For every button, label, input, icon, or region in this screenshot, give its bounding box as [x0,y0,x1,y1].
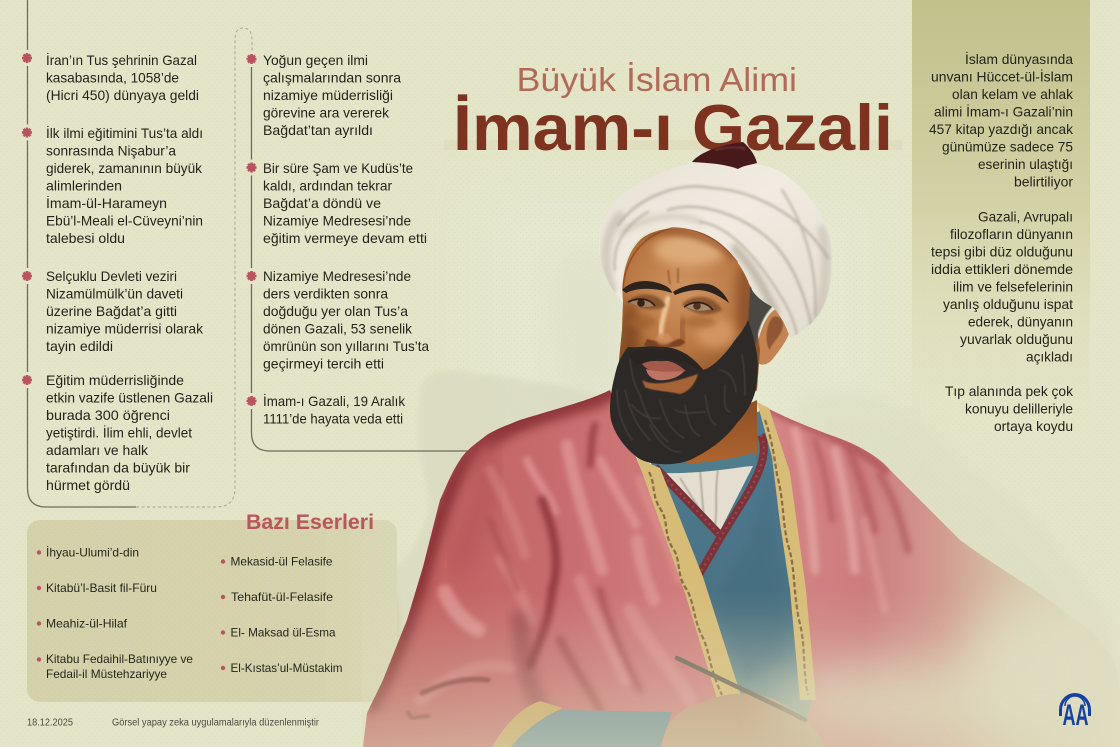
event: death: İmam-ı Gazali, 19 Aralık [263,392,405,409]
nose [661,298,668,336]
event: first education: talebesi oldu [46,231,125,246]
event: teaching: etkin vazife üstlenen Gazali [46,390,213,406]
mouth and moustache [628,349,705,380]
eyebrows [622,281,729,303]
event: birth: kasabasında, 1058’de [46,70,179,86]
collar trim [655,435,764,578]
event: return to Tus: dönen Gazali, 53 senelik [263,322,412,336]
event: first education: sonrasında Nişabur’a [46,144,176,158]
event: teaching: adamları ve halk [46,443,148,458]
event: teaching: Eğitim müderrisliğinde [46,373,184,388]
event: leaving Baghdad [244,51,401,138]
event: return to Tus [244,268,429,372]
event: teaching: burada 300 öğrenci [46,408,170,423]
undergarment [650,410,815,747]
event: return to Tus: ders verdikten sonra [263,286,388,302]
blue collar [661,452,756,473]
event: return to Tus: ömrünün son yıllarını Tus’ta [263,339,429,354]
hair behind ear [748,286,772,345]
robe left side [363,390,735,747]
event: Baghdad appointment [20,268,203,354]
event: birth: (Hicri 450) dünyaya geldi [46,88,199,103]
paragraph: medicine: konuyu delilleriyle [965,402,1073,416]
pen [677,658,805,720]
paragraph: works count [929,50,1073,190]
works list column 1: Meahiz-ül-Hilaf [46,616,128,630]
event: return to Tus: doğduğu yer olan Tus’a [263,304,408,319]
event: Damascus and Jerusalem: Nizamiye Medresesi’nde [263,214,411,228]
gold trim left [637,458,744,715]
eyes [628,294,722,314]
paragraph: round earth: filozofların dünyanın [950,227,1073,242]
event: death [244,392,405,426]
event: birth: İran’ın Tus şehrinin Gazal [46,51,197,68]
paragraph: round earth: Gazali, Avrupalı [978,210,1073,224]
sleeve cuff [492,701,672,747]
event: teaching: yetiştirdi. İlim ehli, devlet [46,424,192,440]
title: Büyük İslam Alimi [516,61,797,98]
paragraph: round earth: yuvarlak olduğunu [960,332,1073,347]
side panel background [912,0,1090,455]
heading: works: Bazı Eserleri [246,511,374,534]
event: leaving Baghdad: Yoğun geçen ilmi [263,53,368,68]
white shirt [662,466,753,533]
event: Damascus and Jerusalem: Bir süre Şam ve Kudüs’te [263,161,413,176]
event: return to Tus: geçirmeyi tercih etti [263,356,384,372]
paragraph: medicine [945,384,1073,434]
title band [444,140,902,150]
footer: Görsel yapay zeka uygulamalarıyla düzenlenmiştir [112,718,320,728]
paragraph: works count: eserinin ulaştığı [978,157,1073,172]
paragraph: round earth: ederek, dünyanın [968,314,1073,330]
panel: selected works [27,511,397,702]
portrait illustration [362,142,1120,747]
event: Damascus and Jerusalem: eğitim vermeye devam etti [263,231,427,246]
neck [685,400,757,466]
turban cap [692,142,757,169]
paragraph: works count: günümüze sadece 75 [942,140,1073,154]
event: Baghdad appointment: Nizamülmülk’ün daveti [46,286,183,302]
footer: 18.12.2025 [27,718,74,728]
event: first education: İmam-ül-Harameyn [46,194,167,211]
face [618,227,760,392]
works list column 2: Mekasid-ül Felasife [230,554,333,568]
paragraph: round earth: yanlış olduğunu ispat [943,297,1073,312]
event: first education: alimlerinden [46,178,122,194]
paragraph: round earth: ilim ve felsefelerinin [953,280,1073,294]
timeline column 2 [244,51,429,426]
title: İmam-ı Gazali [453,91,893,164]
logo: AA: AA [1062,699,1088,732]
works list column 1 [37,546,193,681]
paragraph: round earth: tepsi gibi düz olduğunu [931,244,1073,260]
event: first education [20,124,203,246]
event: Damascus and Jerusalem [244,160,427,246]
event: leaving Baghdad: görevine ara vererek [263,106,389,120]
event: Baghdad appointment: nizamiye müderrisi olarak [46,322,203,336]
side text [929,50,1073,434]
fade wash over lower figure [362,590,1120,747]
paragraph: medicine: Tıp alanında pek çok [945,384,1073,399]
works list column 1: Fedail-il Müstehzariyye [46,667,167,681]
paragraph: works count: belirtiliyor [1014,174,1073,190]
event: Baghdad appointment: üzerine Bağdat’a gitti [46,304,177,319]
paragraph: round earth [931,210,1073,364]
chin skin [642,374,698,394]
works list column 2: El-Kıstas’ul-Müstakim [230,661,343,675]
paragraph: works count: unvanı Hüccet-ül-İslam [931,68,1073,84]
paragraph: works count: İslam dünyasında [965,50,1073,67]
event: first education: giderek, zamanının büyük [46,161,202,176]
works list column 2: El- Maksad ül-Esma [230,626,336,640]
works list column 1: İhyau-Ulumi’d-din [46,546,139,560]
event: Baghdad appointment: Selçuklu Devleti veziri [46,269,177,284]
ear [755,307,791,365]
event: teaching: tarafından da büyük bir [46,460,190,476]
timeline column 1 [20,50,213,493]
event: Baghdad appointment: tayin edildi [46,339,113,354]
paragraph: works count: olan kelam ve ahlak [952,87,1073,102]
event: first education: İlk ilmi eğitimini Tus’ta aldı [46,124,203,141]
event: death: 1111’de hayata veda etti [263,412,403,426]
works list column 2 [221,554,343,675]
event: Damascus and Jerusalem: Bağdat’a döndü ve [263,196,381,211]
event: return to Tus: Nizamiye Medresesi’nde [263,269,411,284]
hand [662,693,825,747]
paragraph: works count: 457 kitap yazdığı ancak [929,122,1073,137]
gold trim right [757,402,816,700]
logo: AA [1060,694,1090,732]
robe right side [757,403,1058,747]
beard [610,320,758,464]
paragraph: works count: alimi İmam-ı Gazali’nin [934,102,1073,120]
paragraph: medicine: ortaya koydu [994,419,1073,434]
event: leaving Baghdad: nizamiye müderrisliği [263,88,393,103]
event: leaving Baghdad: çalışmalarından sonra [263,70,401,86]
turban [599,160,832,338]
paragraph: round earth: açıkladı [1026,350,1073,364]
works list column 1: Kitabü’l-Basit fil-Füru [46,581,157,595]
event: teaching: hürmet gördü [46,478,130,493]
event: first education: Ebü’l-Meali el-Cüveyni’nin [46,214,203,228]
timeline connector lines [28,0,470,507]
works list column 2: Tehafüt-ül-Felasife [231,590,333,604]
paragraph: round earth: iddia ettikleri dönemde [931,262,1073,277]
event: teaching [20,372,213,493]
event: birth [20,50,199,103]
title [453,61,893,164]
forehead lines [668,268,678,284]
works list column 1: Kitabu Fedaihil-Batınıyye ve [46,652,193,666]
event: Damascus and Jerusalem: kaldı, ardından tekrar [263,178,392,194]
event: leaving Baghdad: Bağdat’tan ayrıldı [263,123,373,138]
footer [27,718,320,728]
